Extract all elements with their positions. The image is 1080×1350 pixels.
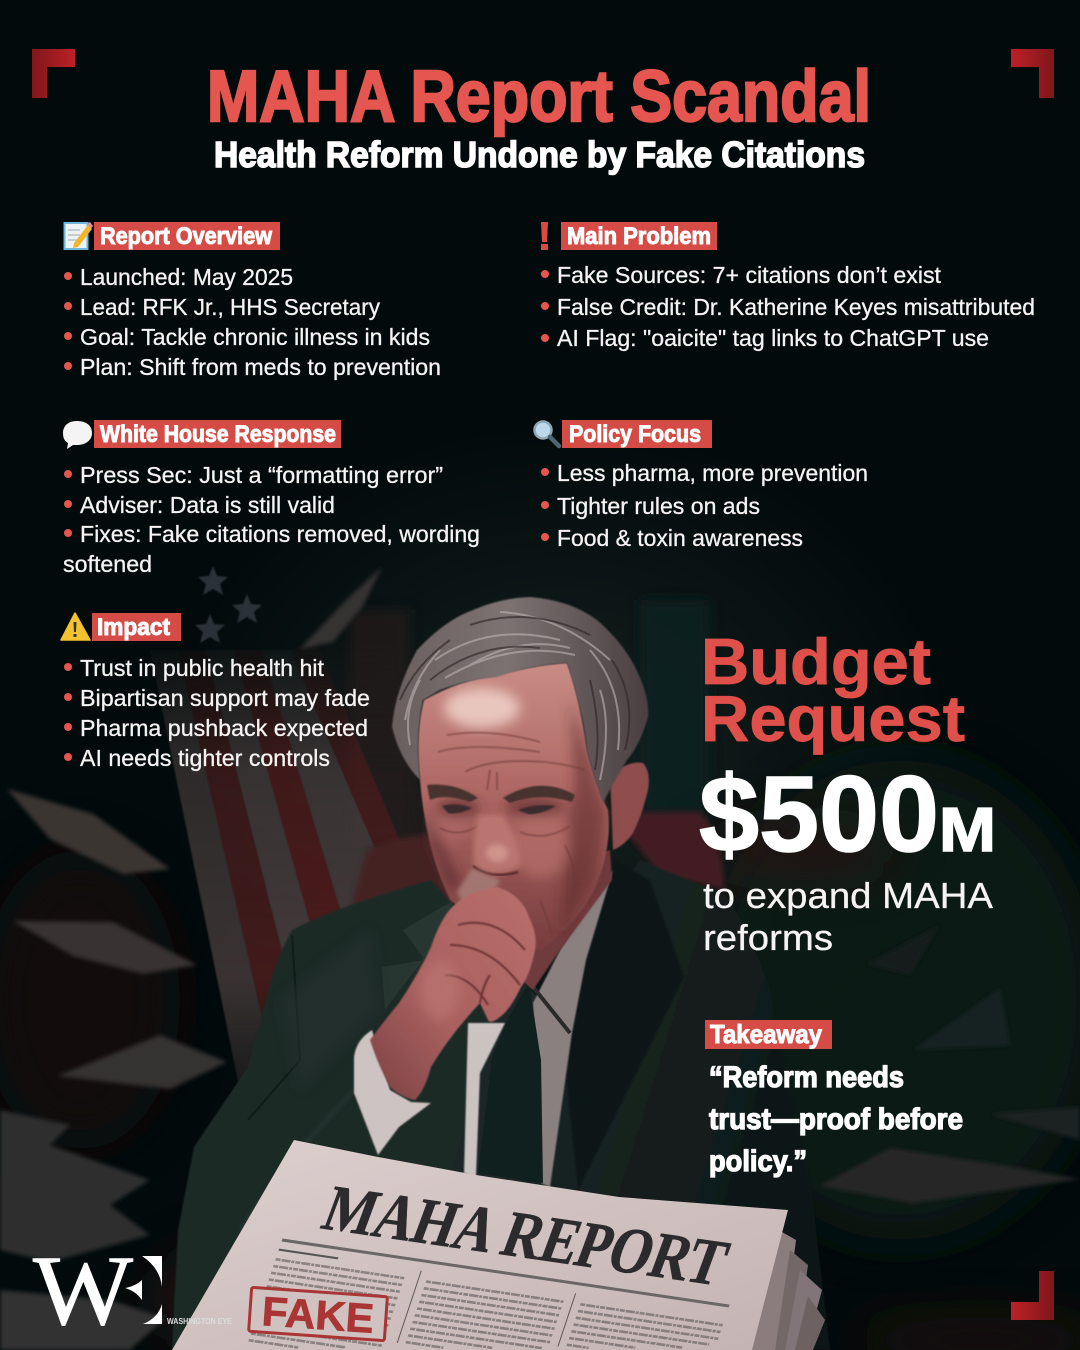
takeaway quote: “Reform needs (709, 1061, 904, 1094)
bullet list: Tighter rules on ads (557, 493, 760, 519)
heading: budget request (701, 625, 965, 755)
budget description: reforms (703, 917, 833, 958)
heading label: White House Response (100, 421, 336, 448)
eyes (442, 804, 556, 814)
bullet list: Goal: Tackle chronic illness in kids (80, 324, 430, 350)
columns of article text (249, 1240, 729, 1350)
bullet list: Adviser: Data is still valid (80, 492, 335, 518)
fist (370, 887, 536, 1100)
bullet list: Launched: May 2025 (80, 264, 293, 290)
eyebrows (427, 785, 575, 803)
American flag backdrop (152, 566, 426, 1081)
bullet list (63, 462, 480, 577)
heading label: Main Problem (567, 223, 711, 250)
sheet (172, 1140, 788, 1350)
panel: white house response (63, 420, 480, 577)
back pages (750, 1228, 825, 1350)
red chair behind figure (350, 812, 725, 940)
icon: warning triangle (61, 613, 90, 640)
panel: takeaway (705, 1019, 963, 1178)
icon: memo and pencil (64, 222, 93, 249)
icon: speech bubble (63, 421, 92, 449)
lapels and sleeve shading (240, 860, 684, 1230)
dark hair strands (400, 617, 629, 770)
logo: Washington Eye (33, 1235, 232, 1346)
forehead wrinkles (438, 733, 585, 935)
heading label: Report Overview (100, 223, 272, 250)
bullet list: AI Flag: "oaicite" tag links to ChatGPT use (557, 325, 989, 351)
shirt cuff (354, 1030, 431, 1155)
heading label: Impact (97, 614, 170, 641)
logo: Washington Eye: W (33, 1235, 134, 1346)
bullet list (64, 655, 370, 771)
bullet list: AI needs tighter controls (80, 745, 330, 771)
pen (525, 977, 570, 1033)
face (418, 663, 609, 950)
FAKE stamp: FAKE (260, 1288, 375, 1342)
heading: budget request: Request (701, 682, 965, 755)
suit (172, 860, 830, 1350)
takeaway quote (709, 1061, 963, 1178)
bullet list: False Credit: Dr. Katherine Keyes misattributed (557, 294, 1035, 320)
bullet list (541, 262, 1035, 351)
logo: Washington Eye: WASHINGTON EYE (167, 1316, 232, 1326)
bullet list: softened (63, 551, 152, 577)
fingers (445, 923, 525, 1005)
icon: exclamation mark (541, 222, 548, 250)
title: MAHA Report Scandal (207, 57, 871, 137)
face shading (428, 700, 606, 935)
flag stripes (152, 648, 426, 1081)
bullet list: Plan: Shift from meds to prevention (80, 354, 441, 380)
tie (478, 983, 543, 1183)
ear (610, 762, 649, 850)
hair strands (405, 612, 619, 780)
bullet list (541, 460, 868, 551)
shirt (464, 1023, 505, 1177)
panel: impact (61, 613, 370, 771)
portrait: man in dark suit (172, 597, 830, 1350)
amount: $500M: $500 (699, 753, 939, 874)
bullet list: Fixes: Fake citations removed, wording (80, 521, 480, 547)
neck (470, 850, 612, 990)
budget description (703, 875, 993, 958)
scattered papers (0, 567, 1080, 1350)
upper lip (457, 868, 500, 902)
nose (457, 815, 520, 902)
panel: report overview (64, 222, 441, 380)
bullet list: Press Sec: Just a “formatting error” (80, 462, 443, 488)
panel: policy focus (534, 420, 868, 551)
bullet list: Lead: RFK Jr., HHS Secretary (80, 294, 380, 320)
bullet list: Trust in public health hit (80, 655, 324, 681)
forehead highlight (444, 688, 520, 728)
newspaper: MAHA Report (172, 1140, 825, 1350)
takeaway quote: trust—proof before (709, 1103, 963, 1136)
panel: budget request (699, 625, 996, 958)
heading label: Takeaway (710, 1019, 822, 1049)
bullet list: Pharma pushback expected (80, 715, 368, 741)
hair (392, 597, 648, 803)
takeaway quote: policy.” (709, 1145, 807, 1178)
heading: budget request: Budget (701, 625, 931, 698)
headline: MAHA REPORT (314, 1173, 737, 1300)
bullet list: Fake Sources: 7+ citations don’t exist (557, 262, 941, 288)
bullet list (64, 264, 441, 380)
heading label: Policy Focus (569, 421, 701, 448)
flag stars (195, 566, 262, 643)
bullet list: Food & toxin awareness (557, 525, 803, 551)
subtitle: Health Reform Undone by Fake Citations (214, 134, 865, 175)
panel: main problem (541, 222, 1035, 351)
icon: magnifying glass (534, 422, 559, 446)
bullet list: Less pharma, more prevention (557, 460, 868, 486)
budget description: to expand MAHA (703, 875, 993, 916)
bullet list: Bipartisan support may fade (80, 685, 370, 711)
amount: $500M: M (939, 796, 996, 865)
